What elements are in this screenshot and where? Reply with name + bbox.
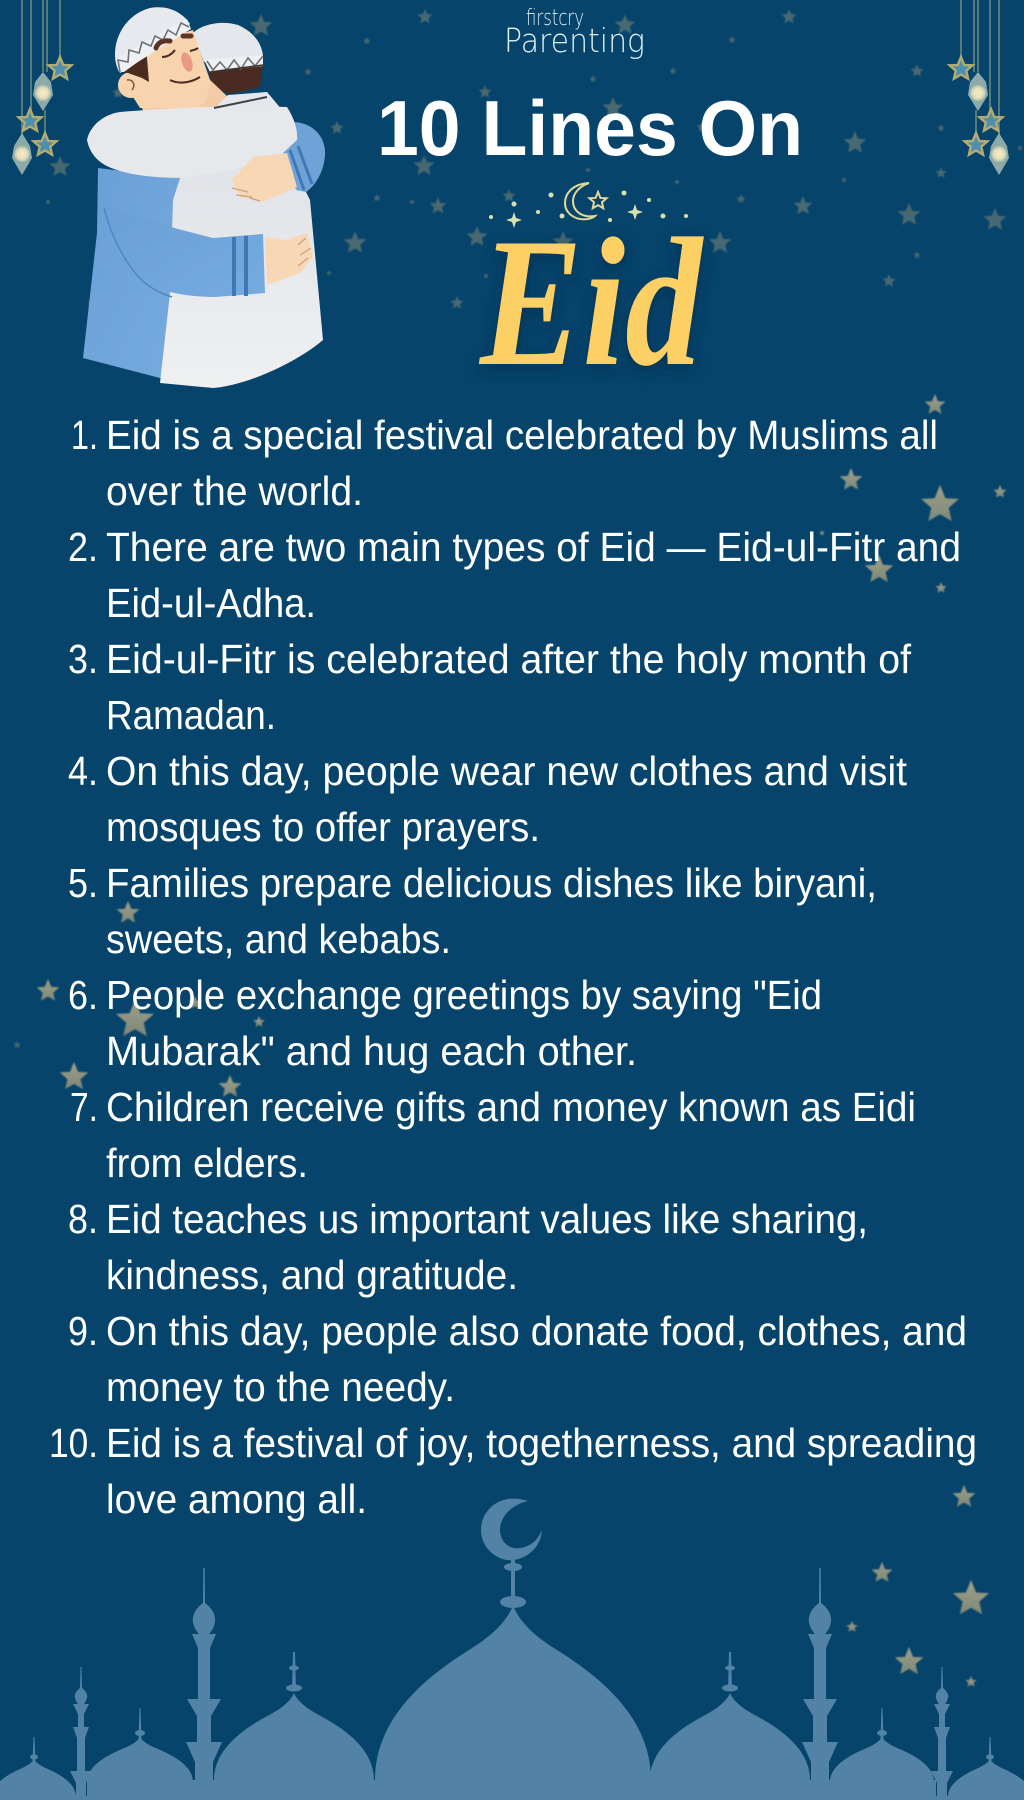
- sleeve stripes: [234, 236, 246, 296]
- line 9: On this day, people also donate food, clothes, and: [106, 1308, 967, 1354]
- side domes: [214, 1652, 810, 1780]
- illustration: two men hugging: [83, 7, 325, 388]
- line 5: Families prepare delicious dishes like biryani,: [106, 860, 877, 906]
- line 9: [68, 1308, 967, 1410]
- list: ten lines: [49, 412, 977, 1522]
- white robe body: [160, 150, 323, 388]
- crescent finial: [481, 1499, 542, 1560]
- far arm cuff stripes: [290, 146, 312, 190]
- line 9: money to the needy.: [106, 1364, 455, 1410]
- cap: [115, 7, 190, 72]
- hair: [122, 46, 149, 82]
- line 10: love among all.: [106, 1476, 367, 1522]
- line 4: [68, 748, 908, 850]
- base: [0, 1780, 1024, 1800]
- line 10: 10.: [49, 1420, 98, 1466]
- second cap band: [204, 55, 263, 72]
- brighter accent stars: [37, 394, 1007, 1687]
- line 7: [70, 1084, 916, 1186]
- icon: hanging lanterns right: [950, 0, 1009, 175]
- faint background stars: [13, 9, 1023, 1048]
- far blue arm: [282, 122, 325, 192]
- second man shoulder: [215, 92, 293, 123]
- line 1: [71, 412, 938, 514]
- line 2: 2.: [68, 524, 98, 570]
- blue sleeve: [103, 205, 265, 297]
- second man hair: [208, 64, 263, 94]
- logo: parenting: Parenting: [504, 21, 645, 60]
- line 3: 3.: [68, 636, 98, 682]
- eyebrows: [156, 36, 191, 48]
- line 4: mosques to offer prayers.: [106, 804, 540, 850]
- line 10: [49, 1420, 977, 1522]
- line 4: 4.: [68, 748, 98, 794]
- line 8: 8.: [68, 1196, 98, 1242]
- nose: [179, 51, 195, 73]
- mosque silhouette: [0, 1499, 1024, 1800]
- second man cap: [193, 23, 263, 62]
- outer domes: [0, 1708, 1024, 1797]
- line 8: Eid teaches us important values like sharing,: [106, 1196, 868, 1242]
- line 2: Eid-ul-Adha.: [106, 580, 316, 626]
- line 3: [68, 636, 912, 738]
- blue robe body: [83, 168, 180, 378]
- sleeve crease: [104, 208, 172, 297]
- main dome: [375, 1558, 651, 1780]
- line 1: over the world.: [106, 468, 363, 514]
- upper hand: [232, 153, 297, 202]
- logo: [504, 6, 645, 60]
- line 5: [68, 860, 877, 962]
- line 7: from elders.: [106, 1140, 308, 1186]
- title: Eid script: Eid: [478, 200, 704, 404]
- line 2: [68, 524, 961, 626]
- line 7: Children receive gifts and money known as Eidi: [106, 1084, 916, 1130]
- line 4: On this day, people wear new clothes and visit: [106, 748, 908, 794]
- neck: [135, 78, 228, 115]
- logo: firstcry: firstcry: [526, 6, 584, 31]
- closed eyes: [162, 48, 198, 57]
- line 1: 1.: [71, 412, 98, 458]
- title: 10 Lines On: 10 Lines On: [377, 84, 803, 172]
- cap band: [115, 19, 191, 73]
- lower hand: [265, 233, 313, 285]
- line 10: Eid is a festival of joy, togetherness, and spreading: [106, 1420, 977, 1466]
- icon: hanging lanterns left: [12, 0, 71, 175]
- face: [133, 30, 210, 108]
- line 6: 6.: [68, 972, 98, 1018]
- line 6: People exchange greetings by saying "Eid: [106, 972, 822, 1018]
- line 2: There are two main types of Eid — Eid-ul-Fitr and: [106, 524, 961, 570]
- line 5: sweets, and kebabs.: [106, 916, 451, 962]
- minarets: [70, 1568, 953, 1800]
- collar: [214, 97, 267, 108]
- line 6: [68, 972, 822, 1074]
- line 6: Mubarak" and hug each other.: [106, 1028, 637, 1074]
- line 8: kindness, and gratitude.: [106, 1252, 518, 1298]
- icon: crescent moon with star and sparkles: [489, 183, 688, 228]
- line 9: 9.: [68, 1308, 98, 1354]
- line 7: 7.: [70, 1084, 98, 1130]
- line 3: Ramadan.: [106, 692, 276, 738]
- ear: [118, 72, 144, 98]
- line 8: [68, 1196, 868, 1298]
- line 3: Eid-ul-Fitr is celebrated after the holy month of: [106, 636, 912, 682]
- line 1: Eid is a special festival celebrated by Muslims all: [106, 412, 938, 458]
- white hugging arm: [87, 106, 297, 178]
- line 5: 5.: [68, 860, 98, 906]
- smile: [170, 77, 200, 83]
